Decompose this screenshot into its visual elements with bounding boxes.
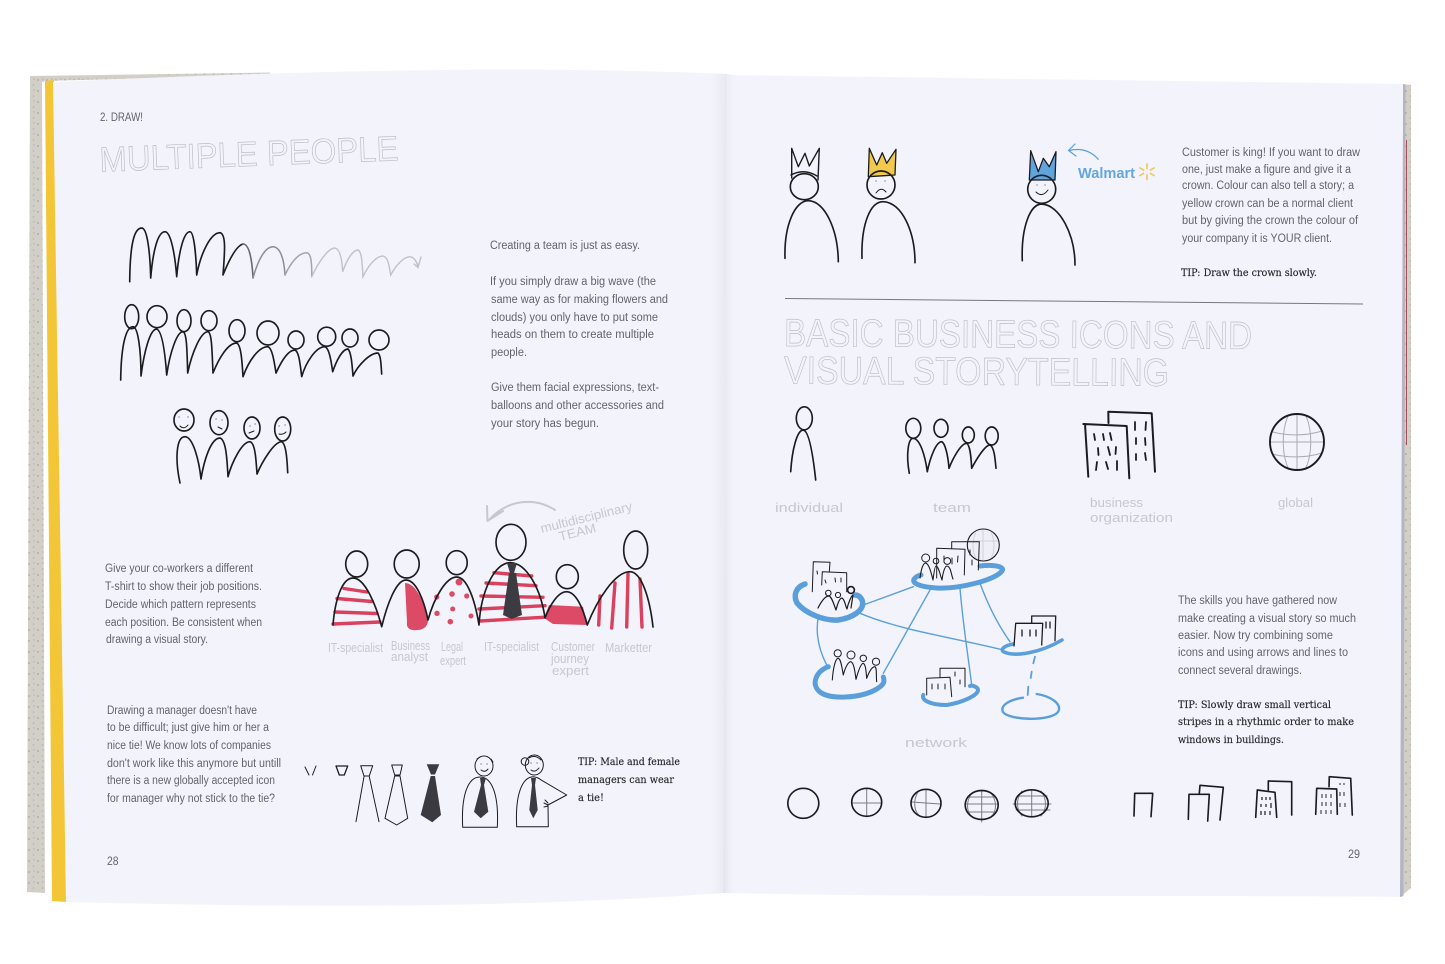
title: basic business icons: VISUAL STORYTELLING xyxy=(784,350,1169,395)
text: the skills: easier. Now try combining some xyxy=(1178,630,1333,642)
text: manager xyxy=(107,705,281,805)
building drawing steps xyxy=(1134,777,1352,821)
pink patterns xyxy=(333,573,642,630)
handwritten labels: global xyxy=(1278,495,1313,510)
blue crown figure xyxy=(1022,151,1075,265)
job labels: IT-specialist xyxy=(484,639,539,654)
text: customer is king: your company it is YOUR client. xyxy=(1182,233,1332,245)
text: customer is king: but by giving the crown the colour of xyxy=(1182,215,1359,227)
title: multiple people: MULTIPLE PEOPLE xyxy=(99,129,399,180)
job labels: Business xyxy=(391,638,430,653)
text: creating a team: clouds) you only have to put some xyxy=(491,312,658,324)
job labels: expert xyxy=(552,663,589,678)
white crown figure xyxy=(785,148,838,262)
text: t-shirts: drawing a visual story. xyxy=(106,634,208,646)
handwritten labels: individual xyxy=(775,500,843,515)
job labels: Marketter xyxy=(605,640,653,655)
text: manager: to be difficult; just give him or her a xyxy=(107,722,270,734)
heads and bodies xyxy=(333,563,653,627)
text: creating a team: If you simply draw a big wave (the xyxy=(490,276,656,288)
tie drawing steps xyxy=(305,764,441,825)
text: manager: for manager why not stick to the tie? xyxy=(107,793,275,805)
tip: managers xyxy=(578,757,680,804)
job labels: Legal xyxy=(441,639,463,654)
text: the skills: connect several drawings. xyxy=(1178,665,1302,677)
title: basic business icons: BASIC BUSINESS ICONS AND xyxy=(784,312,1252,358)
text: t-shirts xyxy=(105,563,262,646)
wave drawing xyxy=(130,228,421,282)
job labels: analyst xyxy=(391,649,428,664)
yellow crown figure xyxy=(862,148,915,263)
text: the skills: windows in buildings. xyxy=(1178,735,1284,746)
text: manager: nice tie! We know lots of companies xyxy=(107,740,271,752)
text: creating a team: Give them facial expressions, text- xyxy=(491,382,659,394)
handwritten labels: business xyxy=(1090,495,1144,510)
network diagram xyxy=(795,529,1062,719)
left page xyxy=(53,70,727,906)
text: the skills: TIP: Slowly draw small vertical xyxy=(1178,700,1331,711)
yellow page edge xyxy=(45,80,67,902)
text: creating a team: Creating a team is just as easy. xyxy=(490,240,640,252)
text: creating a team xyxy=(490,240,668,430)
text: customer is king: TIP: Draw the crown slowly. xyxy=(1181,268,1317,279)
text: creating a team: heads on them to create multiple xyxy=(491,329,654,341)
connecting lines xyxy=(817,583,1035,695)
text: creating a team: same way as for making flowers and xyxy=(491,294,668,306)
handwritten labels xyxy=(775,495,1313,525)
arrow: multidisciplinary team: TEAM xyxy=(557,520,598,544)
text: t-shirts: each position. Be consistent when xyxy=(105,617,262,629)
title: basic business icons xyxy=(784,312,1252,395)
male manager xyxy=(462,756,498,827)
tip: managers: a tie! xyxy=(578,793,604,804)
text: t-shirts: Give your co-workers a different xyxy=(105,563,254,575)
job labels: journey xyxy=(550,651,589,666)
handwritten labels: team xyxy=(933,500,971,515)
tip: managers: TIP: Male and female xyxy=(578,757,680,768)
walmart logo with arrow: Walmart xyxy=(1078,166,1135,182)
arrow: multidisciplinary team xyxy=(487,498,634,544)
globe drawing steps xyxy=(788,788,1051,822)
text: customer is king xyxy=(1181,147,1361,279)
text: manager: Drawing a manager doesn't have xyxy=(107,705,257,717)
arrow: multidisciplinary team: multidisciplinary xyxy=(539,498,634,536)
text: the skills: icons and using arrows and lines to xyxy=(1178,647,1348,659)
icon: individual xyxy=(791,407,816,480)
text: the skills: make creating a visual story so much xyxy=(1178,613,1356,625)
handwritten labels: organization xyxy=(1090,510,1173,525)
text: the skills xyxy=(1178,595,1356,746)
text: customer is king: yellow crown can be a normal client xyxy=(1182,198,1354,210)
text: the skills: The skills you have gathered now xyxy=(1178,595,1338,607)
job labels: IT-specialist xyxy=(328,640,383,655)
text: t-shirts: Decide which pattern represents xyxy=(105,599,256,611)
section label: 2. DRAW! xyxy=(100,112,143,124)
job labels xyxy=(328,638,653,678)
text: customer is king: one, just make a figure and give it a xyxy=(1182,164,1352,176)
text: manager: there is a new globally accepted icon xyxy=(107,775,275,787)
job labels: Customer xyxy=(551,639,596,654)
right page xyxy=(724,75,1403,897)
text: t-shirts: T-shirt to show their job positions. xyxy=(105,581,262,593)
text: creating a team: people. xyxy=(491,347,527,359)
job labels: expert xyxy=(440,653,466,668)
walmart logo with arrow xyxy=(1068,144,1154,182)
row of ten people xyxy=(121,305,389,380)
female manager xyxy=(516,755,567,827)
text: the skills: stripes in a rhythmic order to make xyxy=(1178,717,1354,728)
buildings and people on rings xyxy=(812,529,1056,697)
text: creating a team: your story has begun. xyxy=(491,418,599,430)
page number 28: 28 xyxy=(107,856,118,868)
tie xyxy=(503,563,522,619)
rings xyxy=(795,565,1062,719)
icon: business organization xyxy=(1083,412,1155,478)
network label: network xyxy=(905,735,968,750)
icon: team xyxy=(906,418,998,473)
page number 29: 29 xyxy=(1348,849,1360,861)
multidisciplinary team figures xyxy=(333,524,653,630)
text: creating a team: balloons and other accessories and xyxy=(491,400,664,412)
text: customer is king: crown. Colour can also tell a story; a xyxy=(1182,180,1355,192)
text: manager: don't work like this anymore but untill xyxy=(107,758,281,770)
gutter shading xyxy=(708,73,737,895)
tip: managers: managers can wear xyxy=(578,775,674,786)
text: customer is king: Customer is king! If you want to draw xyxy=(1182,147,1361,159)
icon: global xyxy=(1270,414,1324,470)
four people with faces xyxy=(174,409,291,483)
